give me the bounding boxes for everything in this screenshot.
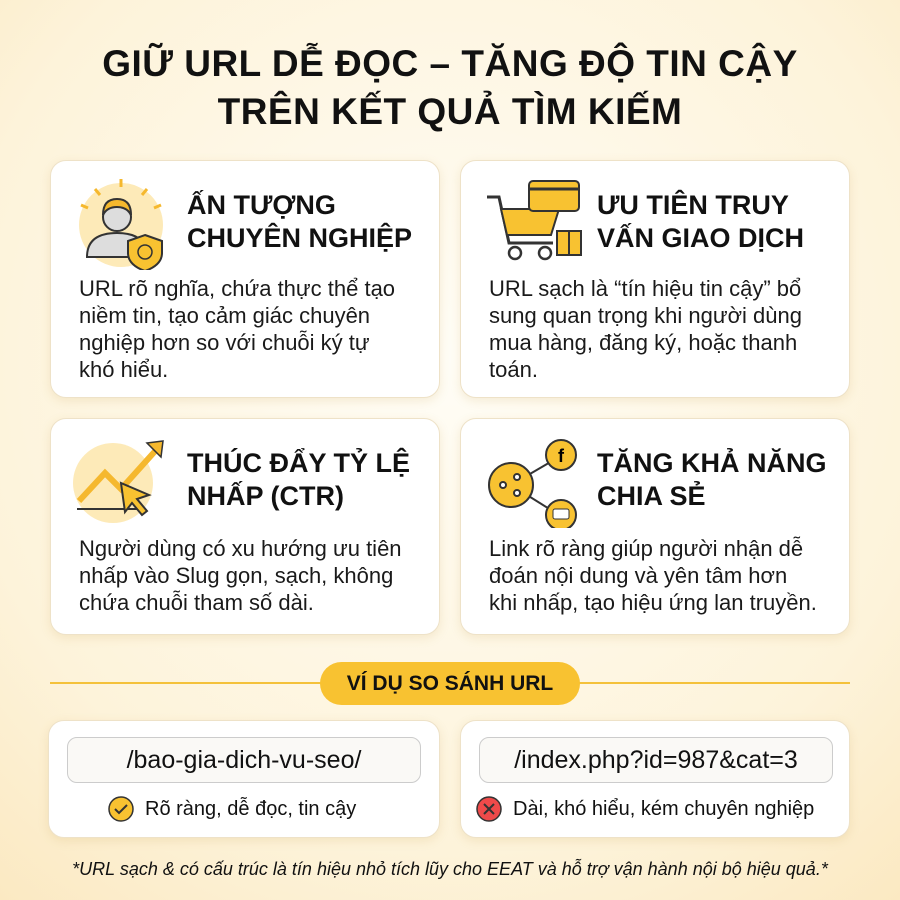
panel: good url [48,720,440,838]
icon: cart card gift [487,180,582,260]
title: GIỮ URL DỄ ĐỌC – TĂNG ĐỘ TIN CẬY [102,43,798,84]
heading: VẤN GIAO DỊCH [597,223,804,253]
heading: THÚC ĐẨY TỶ LỆ [187,448,410,478]
panel: sharing [460,418,850,635]
bad url box [479,737,833,783]
icon: share network [488,439,577,528]
section label [320,662,580,705]
title [102,42,798,132]
panel: transactional queries [460,160,850,398]
footer note: *URL sạch & có cấu trúc là tín hiệu nhỏ tích lũy cho EEAT và hỗ trợ vận hành nội bộ hiệu quả.* [72,859,828,879]
icon: trend arrow cursor [73,440,164,523]
text: URL sạch là “tín hiệu tin cậy” bổ sung quan trọng khi người dùng mua hàng, đăng ký, hoặc thanh toán. [489,276,802,382]
heading: CHUYÊN NGHIỆP [187,223,412,253]
heading [187,190,412,253]
bad note: Dài, khó hiểu, kém chuyên nghiệp [513,798,814,820]
heading: ƯU TIÊN TRUY [597,190,789,220]
heading: CHIA SẺ [597,481,706,511]
good note: Rõ ràng, dễ đọc, tin cậy [145,798,356,820]
heading: TĂNG KHẢ NĂNG [597,448,826,478]
text: Link rõ ràng giúp người nhận dễ đoán nội dung và yên tâm hơn khi nhấp, tạo hiệu ứng lan truyền. [489,536,817,615]
text: Người dùng có xu hướng ưu tiên nhấp vào Slug gọn, sạch, không chứa chuỗi tham số dài. [79,536,402,615]
heading [597,190,804,253]
panel: bad url [460,720,850,838]
panel: CTR [50,418,440,635]
title: TRÊN KẾT QUẢ TÌM KIẾM [218,91,682,132]
text: URL rõ nghĩa, chứa thực thể tạo niềm tin, tạo cảm giác chuyên nghiệp hơn so với chuỗi ký tự khó hiểu. [79,276,395,382]
bad url box: /index.php?id=987&cat=3 [514,746,798,774]
heading [597,448,826,511]
icon: person shield [79,179,163,270]
panel: professional impression [50,160,440,398]
good url box: /bao-gia-dich-vu-seo/ [127,746,361,774]
good url box [67,737,421,783]
heading: ẤN TƯỢNG [187,190,336,220]
heading [187,448,410,511]
section label: VÍ DỤ SO SÁNH URL [347,672,553,695]
icon: share network: f [558,446,565,466]
heading: NHẤP (CTR) [187,481,344,511]
